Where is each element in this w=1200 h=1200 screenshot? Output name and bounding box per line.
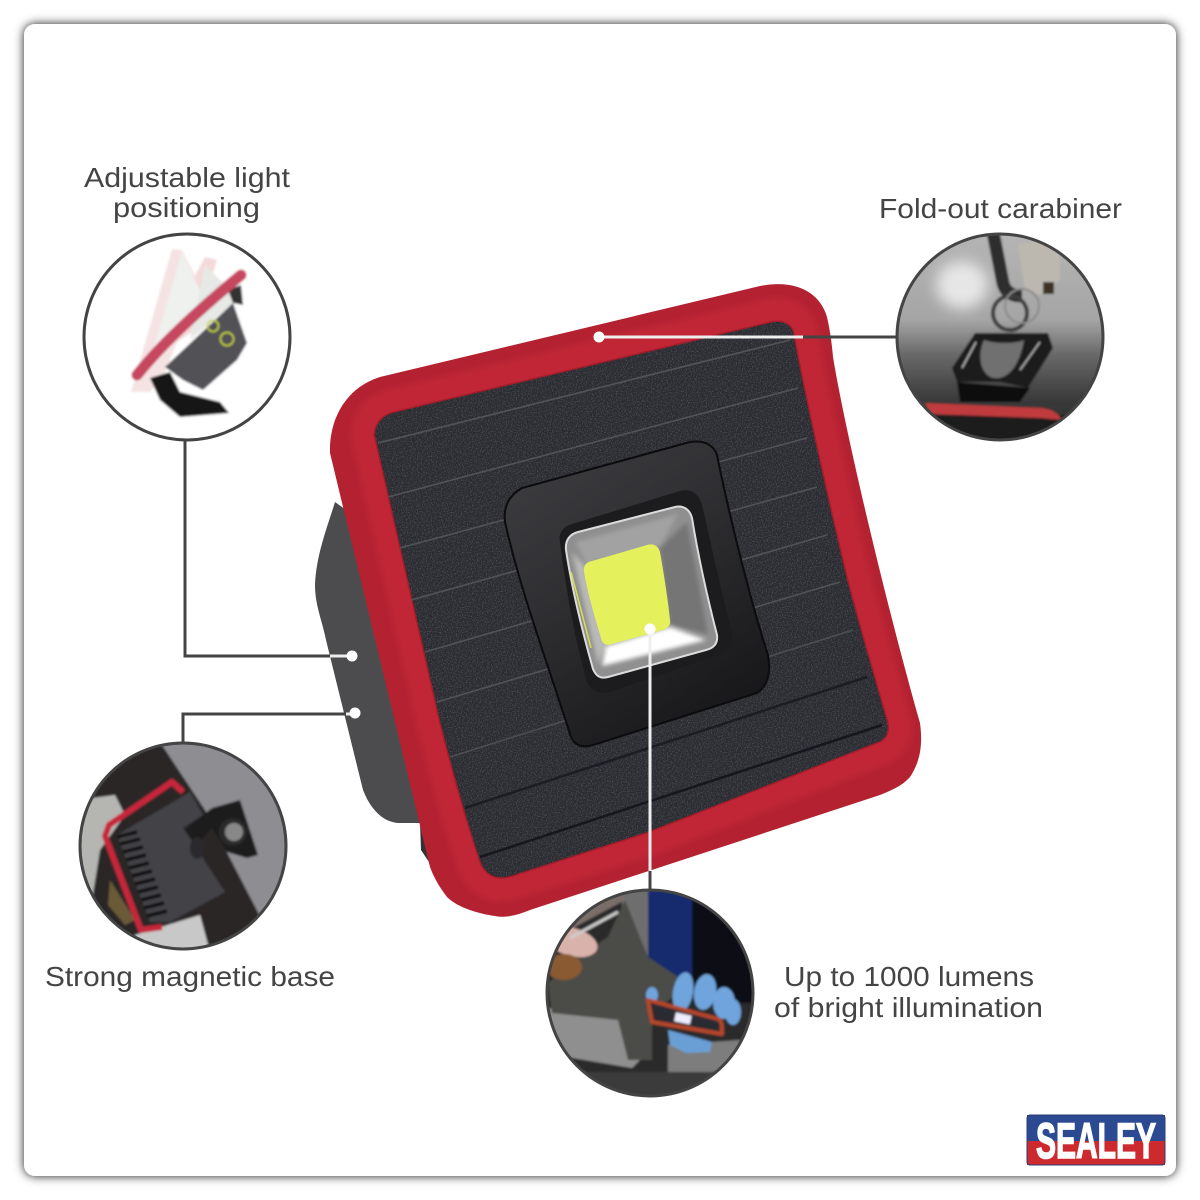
photo circle: adjustable positioning [84, 234, 290, 440]
heading: adjustable light positioning: positioning [113, 192, 260, 223]
heading: adjustable light positioning [84, 162, 290, 223]
leader line: carabiner [594, 332, 898, 342]
leader line: magnetic base [183, 708, 360, 745]
lens reflectors [572, 514, 708, 666]
photo circle: illumination in use [543, 888, 758, 1102]
heading: strong magnetic base: Strong magnetic base [45, 961, 335, 992]
LED housing [505, 442, 769, 746]
lamp rear body [315, 502, 440, 823]
lamp foot [420, 820, 445, 868]
LED yellow chip [584, 544, 670, 645]
LED lens [566, 507, 717, 678]
lamp black ribbed panel [375, 322, 888, 877]
heading: fold-out carabiner: Fold-out carabiner [879, 193, 1122, 224]
leader line: illumination [644, 624, 656, 892]
leader line: adjustable positioning [185, 438, 358, 662]
heading: up to 1000 lumens: of bright illumination [774, 992, 1043, 1023]
heading: up to 1000 lumens [774, 961, 1043, 1023]
photo circle: magnetic base [78, 742, 288, 952]
photo circle: carabiner [890, 232, 1110, 445]
lamp red rubber frame [330, 284, 921, 917]
heading: adjustable light positioning: Adjustable light [84, 162, 290, 193]
LED inner recess [560, 490, 733, 693]
heading: up to 1000 lumens: Up to 1000 lumens [784, 961, 1034, 992]
work light product [315, 284, 921, 917]
